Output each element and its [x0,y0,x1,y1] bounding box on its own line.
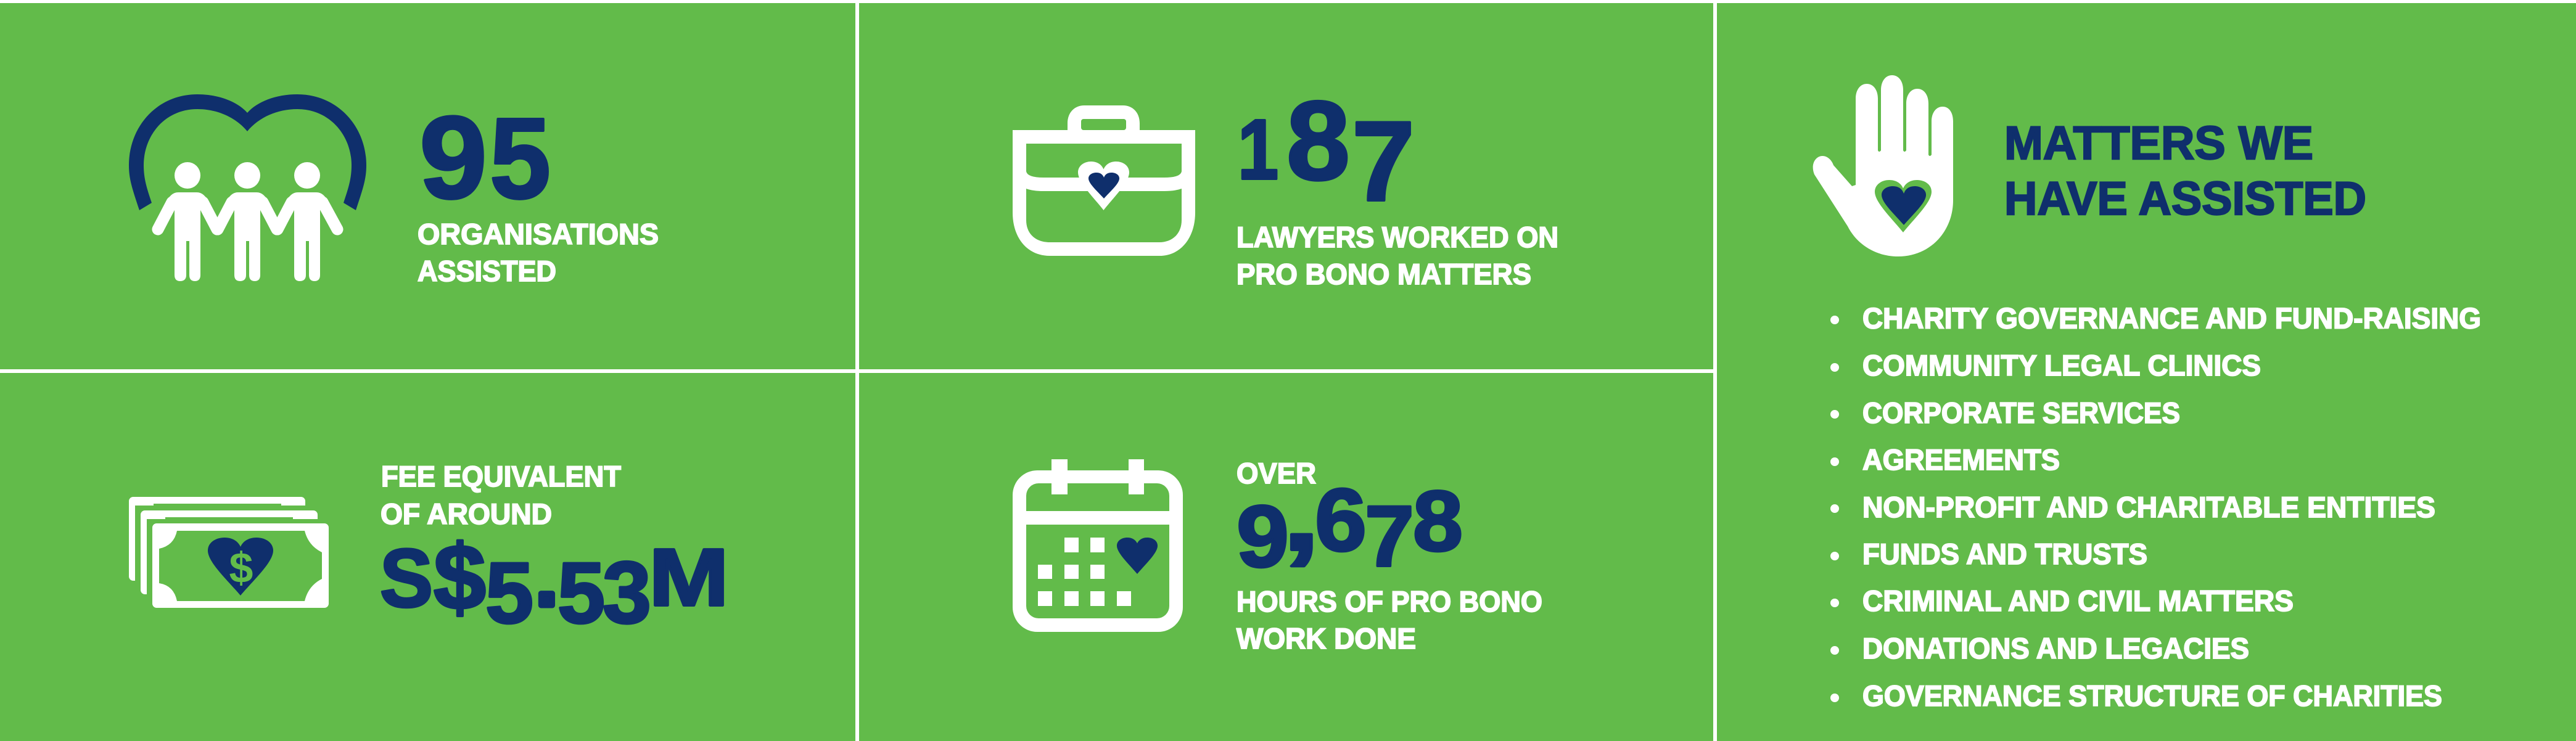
stat: 187: 1 [1238,102,1278,197]
bullet list: CORPORATE SERVICES [1862,396,2180,429]
stat: S$5.53M [380,525,729,642]
label: fee equivalent of around: OF AROUND [381,497,552,530]
stat: S$5.53M: 5 [485,544,533,641]
stat: 187 [1238,78,1415,224]
label: over: OVER [1237,457,1316,489]
bullet list [1830,302,2481,712]
bullet list: NON-PROFIT AND CHARITABLE ENTITIES [1862,491,2435,523]
stat: S$5.53M: $ [434,525,486,629]
stat: 95 [419,92,551,223]
label: fee equivalent of around: FEE EQUIVALENT [381,460,621,493]
stat: 9,678: 9 [1237,488,1289,586]
stat: 95: 5 [490,95,551,223]
label: hours of pro bono work done: WORK DONE [1237,622,1416,655]
bullet list: COMMUNITY LEGAL CLINICS [1862,349,2261,382]
stat: S$5.53M: 3 [603,544,651,642]
label: hours of pro bono work done [1237,585,1542,655]
label: hours of pro bono work done: HOURS OF PRO BONO [1237,585,1542,618]
bullet list: FUNDS AND TRUSTS [1862,538,2147,570]
stat: S$5.53M: . [535,533,558,623]
label: lawyers worked on pro bono matters: PRO BONO MATTERS [1237,258,1531,290]
heart with dollar sign [208,538,273,596]
icon: three people under a heart [129,94,366,281]
stat: 187: 7 [1352,97,1415,224]
stat: 95: 9 [419,92,487,223]
people [158,162,337,281]
label: fee equivalent of around [381,460,621,530]
icon: stack of banknotes with heart [129,497,329,608]
label: organisations assisted [418,218,659,287]
heading: HAVE ASSISTED [2004,173,2366,225]
heading [2004,117,2366,225]
stat: S$5.53M: 5 [558,544,605,641]
label: organisations assisted: ORGANISATIONS [418,218,659,250]
bullet list: CHARITY GOVERNANCE AND FUND-RAISING [1862,302,2481,334]
icon: raised hand with heart [1813,75,1953,256]
panel: lawyers [1013,78,1558,290]
label: lawyers worked on pro bono matters [1237,221,1558,290]
stat: 9,678: , [1282,456,1320,573]
stat: S$5.53M: S [380,533,433,624]
heading: MATTERS WE [2004,117,2313,170]
panel: fee equivalent [129,460,729,642]
stat: 9,678: 8 [1413,473,1463,569]
heart with dollar sign: $ [229,544,253,592]
bullet list: DONATIONS AND LEGACIES [1862,632,2249,665]
stat: 9,678: 6 [1315,470,1367,570]
icon: calendar with heart [1013,459,1183,632]
panel: hours [1013,456,1542,655]
panel: matters we have assisted [1813,75,2481,712]
stat: 9,678 [1237,456,1463,586]
stat: 187: 8 [1286,78,1350,203]
panel: organisations assisted [129,92,659,287]
bullet list: GOVERNANCE STRUCTURE OF CHARITIES [1862,679,2442,712]
heart arc [129,94,366,210]
bullet list: AGREEMENTS [1862,443,2060,476]
label: lawyers worked on pro bono matters: LAWYERS WORKED ON [1237,221,1558,253]
icon: briefcase with heart [1013,105,1195,256]
stat: S$5.53M: M [649,532,729,623]
label: organisations assisted: ASSISTED [418,255,556,287]
stat: 9,678: 7 [1365,488,1414,584]
bullet list: CRIMINAL AND CIVIL MATTERS [1862,584,2294,617]
